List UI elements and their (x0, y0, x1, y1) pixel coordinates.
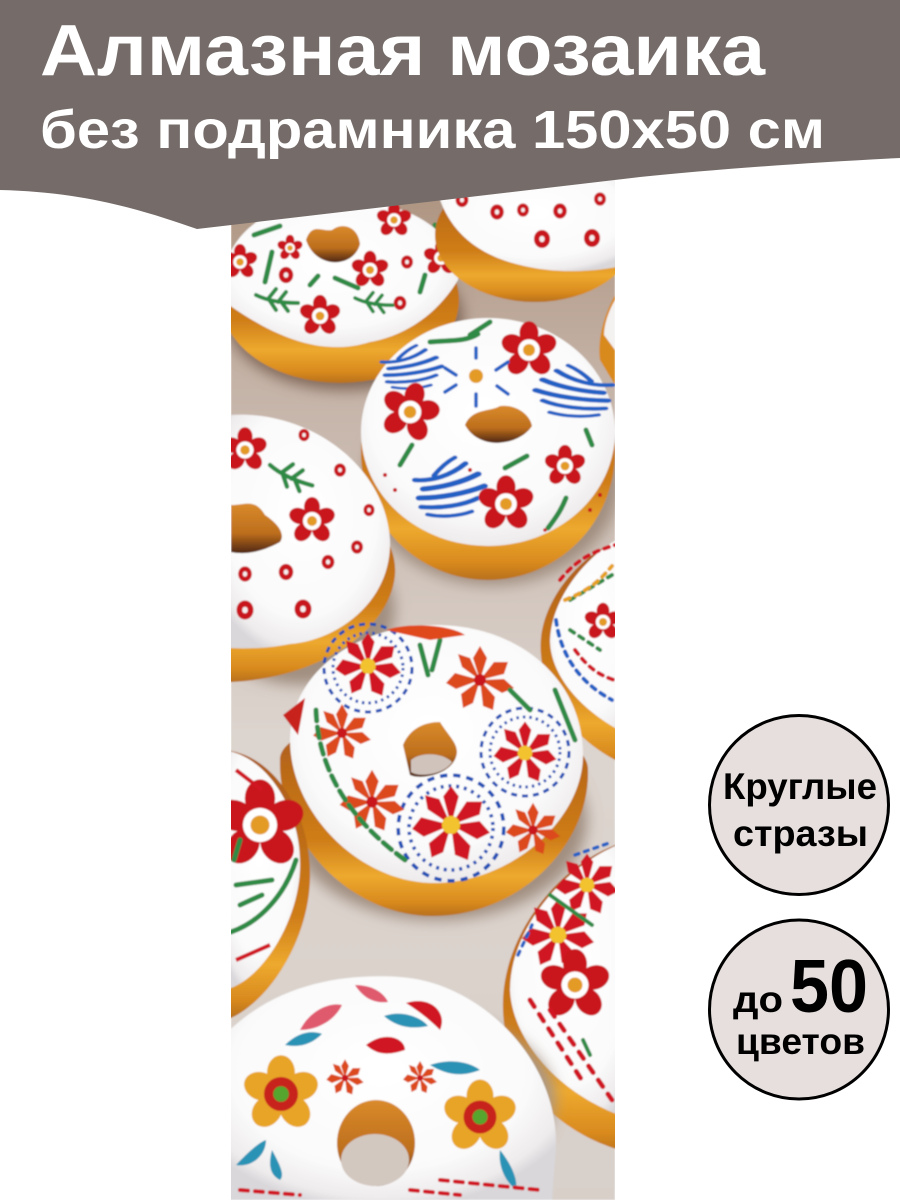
donut: right folk (502, 841, 615, 1150)
donut: centre right blue (361, 318, 620, 585)
badge: up to 50 colours: до (733, 979, 783, 1020)
donut: left folk (231, 750, 311, 1019)
donut: centre folk flowers (280, 624, 588, 920)
badge: up to 50 colours (710, 920, 888, 1099)
badge: round rhinestones: стразы (733, 813, 868, 854)
banner (0, 0, 900, 229)
title: Алмазная мозаика (40, 11, 766, 91)
donut: bottom folk (220, 976, 556, 1200)
subtitle: без подрамника 150х50 см (40, 100, 825, 160)
badge: up to 50 colours: 50 (790, 944, 868, 1028)
donut: top left (221, 200, 463, 390)
donut: right edge red dots (540, 540, 615, 761)
donut: left white with red dots (205, 415, 395, 685)
donut: top right (434, 180, 615, 303)
badge: up to 50 colours: цветов (736, 1021, 865, 1062)
donut mosaic picture (231, 180, 615, 1200)
badge: round rhinestones: Круглые (723, 766, 877, 807)
badge: round rhinestones (710, 716, 888, 894)
donut: right edge small (599, 295, 615, 385)
